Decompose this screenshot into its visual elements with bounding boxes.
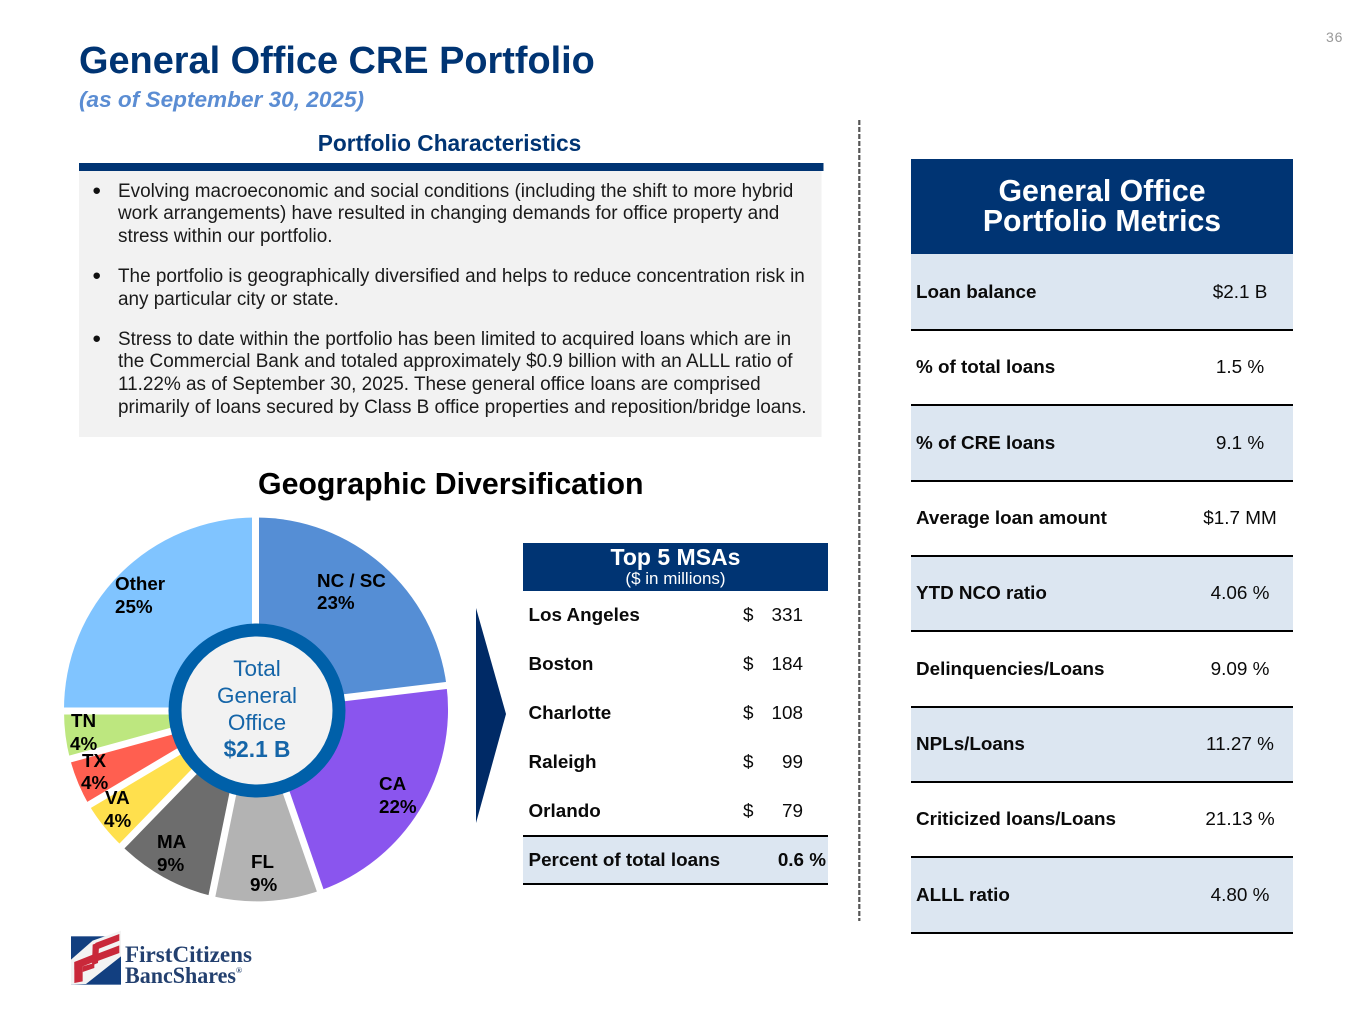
row: percent of total loans: % of total loans [916,356,1055,377]
row: average loan amount: Average loan amount [916,507,1108,528]
row: Charlotte: 108 [771,703,803,724]
wordmark: BancShares [125,963,236,988]
slice: CA [256,685,448,890]
slice: MA [122,710,256,896]
row: NPLs: 11.27 % [1206,734,1274,755]
row: Boston: 184 [771,654,803,675]
row: Orlando: $ [743,801,754,822]
label: VA: 4% [104,810,131,831]
slice: Other [64,518,256,711]
row: delinquencies: 9.09 % [1211,659,1270,680]
table: top 5 MSAs [523,543,828,885]
row: criticized loans: Criticized loans/Loans [916,808,1116,829]
bullet 3: primarily of loans secured by Class B office properties and reposition/bridge loans. [118,397,807,418]
bullet 1: work arrangements) have resulted in changing demands for office property and [117,203,779,224]
donut chart: geographic diversification [50,505,470,915]
row: Charlotte [528,702,803,724]
row: delinquencies: Delinquencies/Loans [916,658,1104,679]
row: YTD NCO ratio: YTD NCO ratio [916,582,1047,603]
label: CA: CA [379,773,406,794]
row: Orlando [528,800,803,822]
row: Orlando: 79 [782,801,803,822]
label: MA: 9% [157,854,184,875]
subtitle: (as of September 30, 2025) [79,87,364,112]
row: percent of total loans: Percent of total loans [528,849,720,870]
label: Other: Other [115,573,165,594]
row: loan balance: Loan balance [916,281,1036,302]
bullet 3 [92,326,807,418]
row: percent of total loans: 0.6 % [778,849,826,870]
bullet 1: stress within our portfolio. [118,226,333,247]
row: NPLs: NPLs/Loans [916,733,1025,754]
row: Orlando: Orlando [528,800,601,821]
row: Raleigh: 99 [782,752,803,773]
wordmark: ® [236,966,242,975]
row: criticized loans: 21.13 % [1205,809,1275,830]
bullet 3: the Commercial Bank and totaled approximately $0.9 billion with an ALLL ratio of [118,351,793,372]
metrics header: General Office [998,175,1206,208]
row: percent of CRE loans: 9.1 % [1216,433,1264,454]
row: percent of total loans [523,835,828,885]
row: loan balance [911,254,1293,331]
label: Other: 25% [115,596,153,617]
row: Boston: Boston [528,653,593,674]
panel: portfolio metrics [911,159,1293,934]
arrow [476,608,506,823]
bullet 1 [92,178,793,247]
row: percent of total loans [911,356,1293,406]
wordmark [125,942,252,988]
row: percent of total loans: 1.5 % [1216,357,1264,378]
label: MA: MA [157,831,186,852]
center ring with total: Total [233,656,281,681]
label: TX: 4% [81,772,108,793]
slice: FL [212,710,320,901]
row: NPLs [911,708,1293,783]
center ring with total: Office [228,710,286,735]
bullet 2: • [92,262,101,290]
wordmark: FirstCitizens [125,942,252,967]
row: Charlotte: Charlotte [528,702,611,723]
row: Charlotte: $ [743,703,754,724]
metrics header [911,159,1293,254]
bullet 2: any particular city or state. [118,289,339,310]
center ring with total: General [217,683,297,708]
row: criticized loans [911,808,1293,858]
label: NC / SC: 23% [317,592,355,613]
heading rule [79,163,824,171]
row: average loan amount: $1.7 MM [1203,508,1277,529]
row: Raleigh: Raleigh [528,751,597,772]
bullet 3: 11.22% as of September 30, 2025. These general office loans are comprised [118,374,761,395]
label: FL: FL [251,851,274,872]
table header: Top 5 MSAs [611,544,740,570]
label: TN: 4% [70,733,97,754]
table header: ($ in millions) [625,569,726,588]
panel: portfolio characteristics [79,130,824,437]
bullet 3: • [92,326,101,352]
row: Los Angeles: 331 [771,605,803,626]
slice: NC / SC [256,518,446,710]
label: TN: TN [71,710,96,731]
row: ALLL ratio: ALLL ratio [916,884,1010,905]
icon: flag [71,931,121,985]
row: percent of CRE loans: % of CRE loans [916,432,1055,453]
row: Los Angeles: $ [743,605,754,626]
row: Boston [528,653,803,675]
row: ALLL ratio [911,858,1293,934]
row: YTD NCO ratio [911,557,1293,632]
center ring with total [175,630,339,791]
page number: 36 [1326,29,1343,45]
label: NC / SC: NC / SC [317,570,386,591]
label: FL: 9% [250,874,277,895]
table header [523,543,828,591]
row: loan balance: $2.1 B [1213,282,1267,303]
bullet 1: • [92,178,101,204]
logo: First Citizens BancShares [71,931,252,988]
label: TX: TX [82,750,106,771]
row: ALLL ratio: 4.80 % [1211,885,1270,906]
heading: geographic diversification: Geographic Diversification [258,468,644,501]
bullet 2: The portfolio is geographically diversified and helps to reduce concentration risk in [118,266,805,287]
bullet 1: Evolving macroeconomic and social conditions (including the shift to more hybrid [118,181,793,202]
slice: TN [64,710,256,759]
row: Los Angeles: Los Angeles [528,604,640,625]
row: YTD NCO ratio: 4.06 % [1211,583,1270,604]
row: Los Angeles [528,604,803,626]
slice: TX [70,710,256,805]
label: VA: VA [105,787,130,808]
heading: portfolio characteristics: Portfolio Characteristics [318,130,581,156]
row: Boston: $ [743,654,754,675]
row: delinquencies [911,658,1293,708]
vertical divider [858,120,860,921]
row: percent of CRE loans [911,406,1293,482]
row: average loan amount [911,507,1293,557]
text panel background [79,171,822,437]
slice: VA [89,710,256,846]
title: General Office CRE Portfolio [79,40,595,82]
label: CA: 22% [379,796,417,817]
center ring with total: $2.1 B [224,736,290,762]
bullet 2 [92,262,805,310]
metrics header: Portfolio Metrics [983,205,1221,238]
row: Raleigh: $ [743,752,754,773]
row: Raleigh [528,751,803,773]
bullet 3: Stress to date within the portfolio has been limited to acquired loans which are in [118,329,791,350]
